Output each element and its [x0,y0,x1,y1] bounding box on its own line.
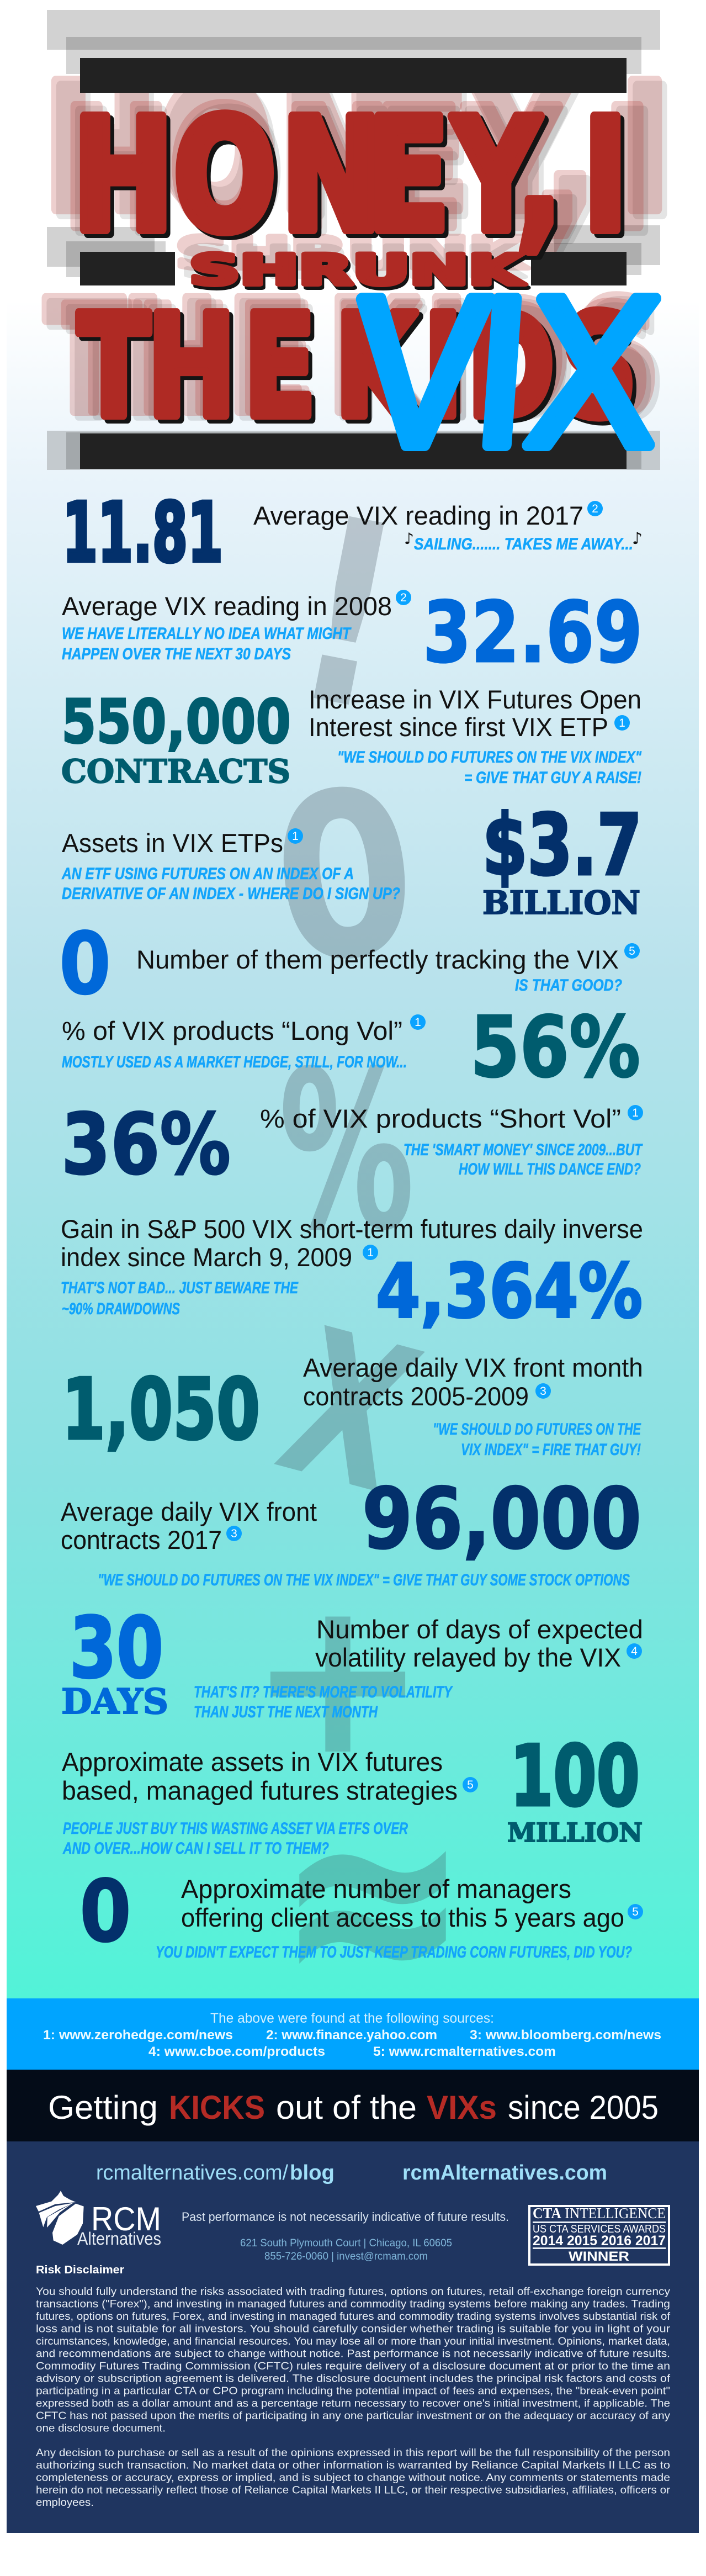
title graphic: THE KIDS [68,281,656,451]
disclaimer paragraph 1 [36,2286,671,2434]
award badge: CTA Intelligence: CTA INTELLIGENCE [533,2205,666,2221]
stat: 4,364%: Gain in S&P 500 VIX short-term futures daily inverse [61,1214,643,1244]
title graphic: SHRUNK [192,248,528,298]
title graphic: THE KIDS [64,276,651,446]
disclaimer paragraph 2: herein do not necessarily reflect those of Reliance Capital Markets II LLC, or their respective subsidiaries, affiliates, officers or [36,2485,671,2496]
stat: 4,364%: ~90% DRAWDOWNS [62,1300,180,1318]
banner: getting kicks: Getting [48,2089,158,2126]
stat: 32.69: HAPPEN OVER THE NEXT 30 DAYS [62,645,291,663]
stat: 11.81: 11.81 [62,485,223,580]
stat: 1,050: 1,050 [62,1361,260,1458]
disclaimer paragraph 1: CFTC has not passed upon the merits of participating in any one particular investment or on the adequacy or accuracy of any [36,2410,671,2422]
panel: sources: 3: www.bloomberg.com/news [470,2028,661,2043]
stat: 56% long vol: % of VIX products “Long Vol” [62,1016,402,1045]
stat: 100 million [62,1727,643,1858]
stat: 0 tracking: 5 [629,945,635,958]
title graphic: HONEY, I [63,73,651,265]
title graphic: HONEY, I [48,52,675,255]
stat: 11.81: 2 [592,502,598,515]
contact text: Past performance is not necessarily indicative of future results. [182,2210,509,2224]
stat: 96,000: contracts 2017 [61,1525,222,1554]
disclaimer paragraph 2: Any decision to purchase or sell as a result of the opinions expressed in this report will be the full responsibility of the person [36,2447,670,2459]
title graphic: THE KIDS [78,285,637,449]
banner: getting kicks: KICKS [169,2089,265,2126]
stat: 1,050: Average daily VIX front month [303,1353,643,1382]
stat: 1,050: contracts 2005-2009 [303,1382,529,1411]
award badge: CTA Intelligence: US CTA SERVICES AWARDS [533,2223,666,2235]
banner: getting kicks: VIXs [427,2089,497,2126]
title graphic: SHRUNK [182,237,525,287]
stat: 0 tracking [59,914,640,1014]
stat: 96,000: 96,000 [362,1470,641,1568]
stat: 550,000 contracts [61,685,642,790]
panel: sources: 1: www.zerohedge.com/news [43,2028,233,2043]
stat: 550,000 contracts: Increase in VIX Futures Open [309,685,641,714]
stat: 550,000 contracts: Interest since first VIX ETP [309,712,608,742]
stat: 30 days: THAN JUST THE NEXT MONTH [194,1703,378,1721]
links: rcmalternatives.com/ [96,2161,288,2184]
award badge: CTA Intelligence [529,2205,669,2265]
stat: 32.69: Average VIX reading in 2008 [62,591,392,621]
stat: 550,000 contracts: CONTRACTS [61,753,290,790]
disclaimer paragraph 2: completeness or accuracy, express or implied, and is subject to change without notice. Any comments or statements made [36,2472,670,2484]
stat: 96,000: Average daily VIX front [61,1497,317,1526]
stat: 56% long vol: MOSTLY USED AS A MARKET HEDGE, STILL, FOR NOW... [62,1053,407,1071]
stat: 1,050 [62,1353,643,1459]
title graphic: THE KIDS [45,268,660,448]
disclaimer paragraph 2: employees. [36,2497,94,2509]
stat: 96,000: 3 [231,1527,237,1540]
stat: 550,000 contracts: = GIVE THAT GUY A RAISE! [464,769,641,787]
stat: 30 days: Number of days of expected [316,1615,643,1644]
stat: 100 million: Approximate assets in VIX futures [62,1747,443,1776]
stat: 0 managers: 5 [632,1906,639,1918]
stat: 30 days: 30 [70,1599,163,1697]
watermark: percent brush mark: % [279,1024,415,1279]
title graphic: HONEY, I [73,86,628,266]
title graphic: HONEY, I [77,90,631,270]
panel: sources: 2: www.finance.yahoo.com [266,2028,437,2043]
stat: 30 days: volatility relayed by the VIX [315,1643,621,1672]
watermark: exclamation brush mark: ! [274,462,422,769]
disclaimer paragraph 1: futures, options on futures, Forex, and investing in managed futures and commodity trading systems involves substantial risk of [36,2311,671,2323]
watermark: approximately brush mark: ≈ [274,1738,471,2060]
panel: sources: 5: www.rcmalternatives.com [373,2044,556,2059]
panel: sources: 4: www.cboe.com/products [148,2044,325,2059]
stat: 100 million: AND OVER...HOW CAN I SELL IT TO THEM? [62,1839,329,1858]
stat: 0 managers [79,1861,643,1961]
disclaimer paragraph 1: You should fully understand the risks associated with trading futures, options on futures, retail off-exchange foreign currency [36,2286,671,2298]
stat: 36% short vol: % of VIX products “Short Vol” [260,1104,621,1133]
stat: 0 tracking: Number of them perfectly tracking the VIX [136,945,619,974]
stat: 30 days: THAT'S IT? THERE'S MORE TO VOLATILITY [194,1683,453,1701]
stat: $3.7 billion: DERIVATIVE OF AN INDEX - WHERE DO I SIGN UP? [62,885,400,903]
disclaimer paragraph 2: authorizing such transaction. No market data or other information is warranted by Reliance Capital Markets II LLC as to [36,2459,670,2472]
links: blog [290,2161,335,2184]
logo: RCM Alternatives: RCM [91,2201,161,2238]
stat: 550,000 contracts: 550,000 [61,686,291,757]
stat: 11.81: Average VIX reading in 2017 [253,501,583,530]
title graphic: HONEY, I [67,78,656,269]
watermark: plus brush mark: + [248,1552,428,1802]
title graphic [43,10,675,490]
disclaimer paragraph 1: advisory or subscription agreement is delivered. The disclosure document includes the principal risk factors and costs of [36,2373,671,2384]
stat: 0 tracking: IS THAT GOOD? [515,976,622,995]
stat: 32.69: 2 [400,591,407,604]
disclaimer paragraph 1: transactions ("Forex"), and investing in managed futures and commodity trading systems before making any trades. Trading [36,2298,670,2310]
stat: 36% short vol [61,1096,643,1193]
contact text [182,2210,509,2262]
disclaimer paragraph 1: one disclosure document. [36,2423,166,2434]
title graphic: SHRUNK [189,245,525,294]
award badge: CTA Intelligence: WINNER [569,2249,629,2264]
stat: 30 days: 4 [631,1645,638,1658]
stat: 96,000 [61,1470,641,1589]
disclaimer paragraph 1: circumstances, knowledge, and financial resources. You may lose all or more than your initial investment. Opinions, market data, [36,2336,670,2347]
logo: RCM Alternatives [36,2191,161,2249]
panel: sources: The above were found at the following sources: [210,2011,494,2026]
stat: 32.69: WE HAVE LITERALLY NO IDEA WHAT MIGHT [62,625,352,643]
stat: 4,364%: 4,364% [376,1248,643,1335]
stat: 100 million: 5 [467,1779,474,1791]
stat: 4,364%: THAT'S NOT BAD... JUST BEWARE THE [61,1279,299,1297]
stat: $3.7 billion: $3.7 [482,796,642,894]
contact text: 621 South Plymouth Court | Chicago, IL 60605 [240,2238,452,2249]
stat: 100 million: MILLION [507,1818,643,1848]
title graphic: THE KIDS [50,273,665,453]
stat: 0 managers: 0 [79,1861,131,1961]
stat: 100 million: PEOPLE JUST BUY THIS WASTING ASSET VIA ETFS OVER [63,1819,408,1838]
title graphic: THE KIDS [82,289,641,453]
stat: 4,364%: index since March 9, 2009 [61,1242,352,1272]
stat: 0 managers: offering client access to this 5 years ago [181,1903,624,1932]
disclaimer paragraph 2 [36,2447,671,2509]
stat: 30 days [61,1599,643,1722]
disclaimer heading: Risk Disclaimer [36,2264,124,2276]
banner: getting kicks: since 2005 [508,2089,659,2126]
panel: sources [7,1998,699,2070]
stat: 36% short vol: HOW WILL THIS DANCE END? [459,1160,641,1178]
contact text: 855-726-0060 | invest@rcmam.com [264,2251,428,2262]
title graphic: SHRUNK [176,228,529,279]
logo: RCM Alternatives: Alternatives [77,2229,161,2249]
banner: getting kicks: out of the [276,2089,417,2126]
panel: footer [7,2141,699,2533]
stat: 550,000 contracts: 1 [619,717,625,729]
stat: 1,050: VIX INDEX" = FIRE THAT GUY! [461,1441,641,1459]
stat: $3.7 billion: BILLION [482,884,640,922]
stat: 32.69: 32.69 [423,584,643,681]
stat: 11.81: ♪ [404,530,414,548]
title graphic: VIX [347,253,667,490]
stat: 4,364% [61,1214,643,1335]
award badge: CTA Intelligence: 2014 2015 2016 2017 [533,2233,666,2249]
stat: 56% long vol [62,998,640,1096]
stat: 100 million: based, managed futures strategies [62,1776,458,1805]
watermark: X brush mark: X [255,1287,443,1537]
disclaimer paragraph 1: and recommendations are subject to change without notice. Past performance is not necessarily indicative of future results. [36,2348,670,2360]
stat: 11.81: ♪ [632,529,643,548]
disclaimer paragraph 1: expressed both as a dollar amount and as a percentage return necessary to recover one's initial investment, if applicable. The [36,2398,670,2410]
watermark: zero brush mark: 0 [267,750,423,1003]
stat: 11.81: SAILING....... TAKES ME AWAY... [414,535,633,553]
disclaimer paragraph 1: loss and is not suitable for all investors. You should carefully consider whether trading is suitable for you in light of your [36,2324,671,2335]
disclaimer paragraph 1: Commodity Futures Trading Commission (CFTC) rules require delivery of a disclosure document at or prior to the time an [36,2361,670,2372]
stat: 56% long vol: 1 [415,1016,421,1029]
stat: $3.7 billion: 1 [292,830,299,843]
stat: $3.7 billion: Assets in VIX ETPs [62,828,283,858]
stat: 0 managers: Approximate number of managers [181,1874,571,1903]
stat: $3.7 billion [61,796,642,922]
stat: $3.7 billion: AN ETF USING FUTURES ON AN INDEX OF A [61,865,354,883]
links: rcmAlternatives.com [402,2161,607,2184]
stat: 1,050: 3 [540,1385,546,1398]
stat: 36% short vol: 36% [61,1096,231,1193]
links [96,2161,607,2184]
stat: 32.69 [62,584,643,681]
title graphic: HONEY, I [43,47,670,250]
banner: getting kicks [7,2070,699,2141]
stat: 100 million: 100 [510,1727,640,1825]
stat: 11.81 [62,485,643,580]
stat: 56% long vol: 56% [470,998,640,1096]
disclaimer paragraph 1: participating in a particular CTA or CPO program including the potential impact of fees and expenses, the "break-even point" [36,2385,670,2397]
stat: 0 tracking: 0 [59,914,111,1014]
stat: 36% short vol: 1 [632,1107,639,1119]
stat: 4,364%: 1 [367,1246,374,1259]
stat: 30 days: DAYS [61,1681,168,1722]
